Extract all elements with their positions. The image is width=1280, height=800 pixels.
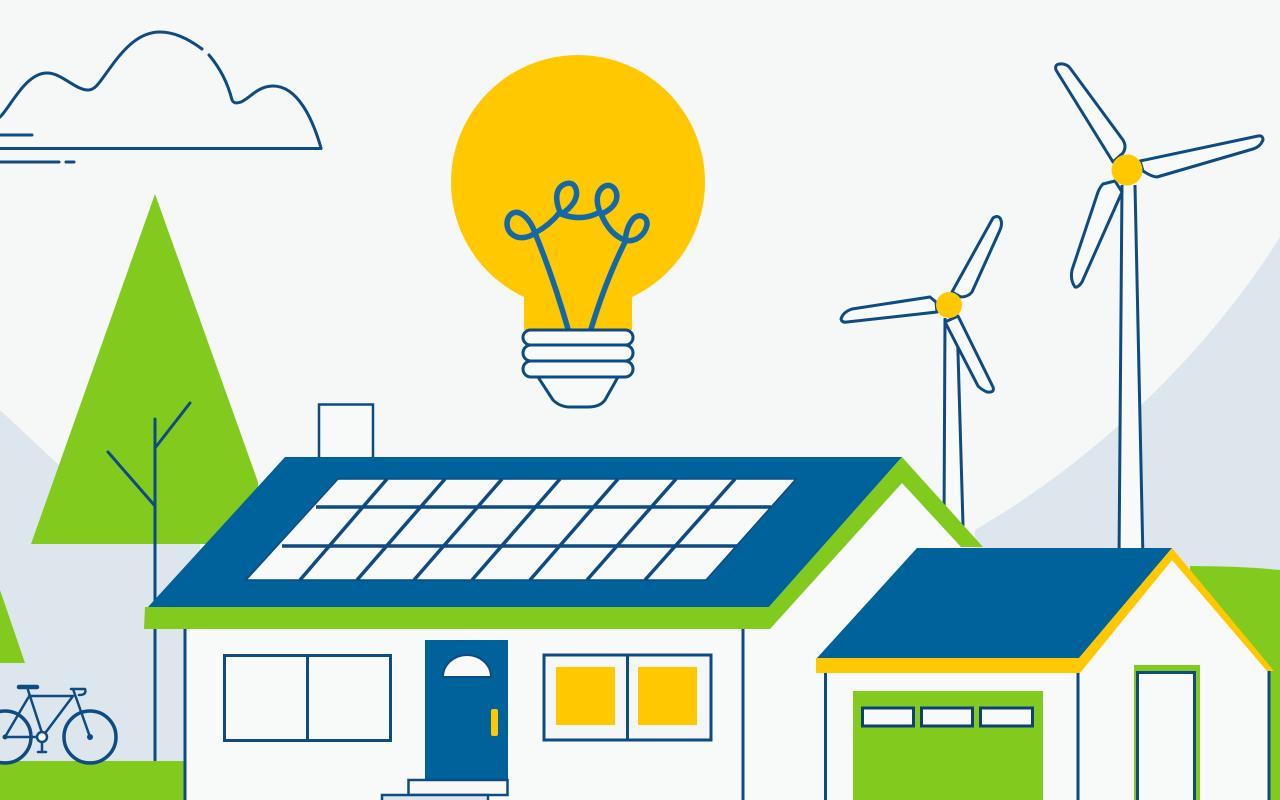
- window: right with lit panes: [544, 655, 711, 741]
- ground: left grass: [0, 761, 184, 800]
- solar panel array: [246, 479, 796, 580]
- hill: right green: [1190, 566, 1280, 800]
- front steps: [382, 780, 508, 800]
- hill: right background: [975, 237, 1280, 600]
- house gable and walls: [186, 470, 1080, 800]
- garage: [816, 548, 1274, 800]
- roof green trim: [144, 457, 983, 629]
- garage walls: [825, 560, 1268, 800]
- hill: left background: [0, 410, 200, 800]
- window: left: [224, 655, 390, 741]
- icon: small wind turbine: [841, 216, 1002, 525]
- main house: [144, 457, 1080, 800]
- icon: bare sapling: [108, 403, 190, 760]
- bulb screw base: [523, 330, 633, 407]
- side door: [1134, 665, 1200, 800]
- icon: large green tree: [31, 194, 258, 544]
- roof: [148, 457, 902, 607]
- bulb filament: [507, 183, 647, 329]
- icon: bicycle: [0, 687, 116, 763]
- icon: small green tree: [0, 590, 25, 663]
- wall lines: [185, 629, 743, 800]
- icon: chimney: [319, 404, 373, 458]
- bulb glass: [451, 55, 705, 330]
- garage wall lines: [826, 671, 1269, 800]
- garage yellow trim: [816, 548, 1274, 673]
- icon: cloud: [0, 32, 321, 162]
- garage door: [853, 691, 1043, 800]
- icon: large wind turbine: [1056, 64, 1263, 560]
- garage roof: [817, 548, 1172, 658]
- icon: light bulb: [451, 55, 705, 407]
- door: [425, 640, 508, 782]
